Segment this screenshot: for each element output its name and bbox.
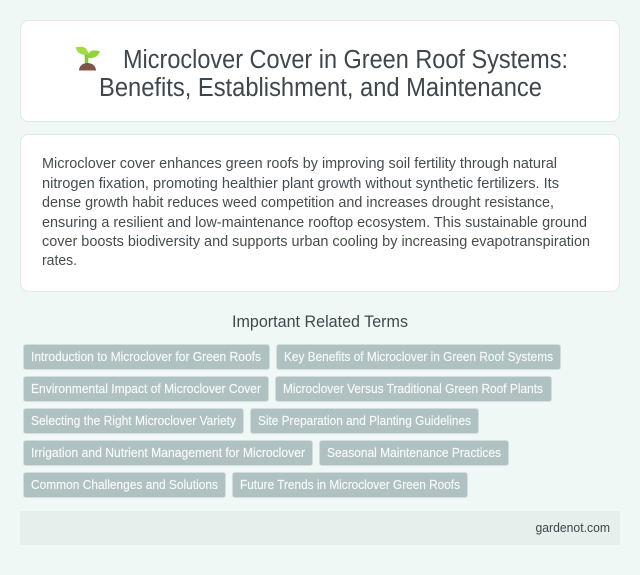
tag: Site Preparation and Planting Guidelines bbox=[258, 414, 471, 428]
icon: seedling bbox=[76, 47, 100, 70]
tag bbox=[276, 376, 552, 402]
tag: Environmental Impact of Microclover Cover bbox=[31, 382, 261, 396]
description text bbox=[42, 156, 590, 269]
tag: Key Benefits of Microclover in Green Roof Systems bbox=[284, 350, 553, 364]
tag bbox=[276, 344, 560, 370]
title text bbox=[99, 46, 568, 102]
footer bbox=[20, 511, 620, 545]
heading: related terms: Important Related Terms bbox=[232, 313, 408, 331]
panel: title card bbox=[20, 20, 620, 122]
description text: nitrogen fixation, promoting healthier plant growth without synthetic fertilizers. Its bbox=[42, 176, 559, 192]
tag: Microclover Versus Traditional Green Roof Plants bbox=[283, 382, 543, 396]
description text: cover boosts biodiversity and supports urban cooling by increasing evapotranspiration bbox=[42, 234, 590, 250]
tag: Introduction to Microclover for Green Roofs bbox=[31, 350, 261, 364]
tag bbox=[24, 376, 268, 402]
tag bbox=[232, 472, 468, 498]
footer site name: gardenot.com bbox=[536, 520, 610, 535]
tag: Future Trends in Microclover Green Roofs bbox=[240, 478, 460, 492]
tag list bbox=[24, 344, 560, 498]
tag bbox=[24, 472, 226, 498]
description text: ensuring a resilient and low-maintenance rooftop ecosystem. This sustainable ground bbox=[42, 215, 587, 231]
tag: Irrigation and Nutrient Management for Microclover bbox=[31, 446, 305, 460]
tag: Common Challenges and Solutions bbox=[31, 478, 218, 492]
tag bbox=[24, 344, 270, 370]
title text: Microclover Cover in Green Roof Systems: bbox=[123, 46, 568, 74]
description text: rates. bbox=[42, 253, 77, 269]
tag: Selecting the Right Microclover Variety bbox=[31, 414, 237, 428]
description text: Microclover cover enhances green roofs by improving soil fertility through natural bbox=[42, 156, 557, 172]
description text: dense growth habit reduces weed competition and increases drought resistance, bbox=[42, 195, 554, 211]
title text: Benefits, Establishment, and Maintenance bbox=[99, 74, 542, 102]
tag bbox=[320, 440, 508, 466]
tag bbox=[24, 408, 244, 434]
tag: Seasonal Maintenance Practices bbox=[327, 446, 501, 460]
tag bbox=[24, 440, 312, 466]
tag bbox=[250, 408, 478, 434]
panel: description card bbox=[20, 134, 620, 292]
